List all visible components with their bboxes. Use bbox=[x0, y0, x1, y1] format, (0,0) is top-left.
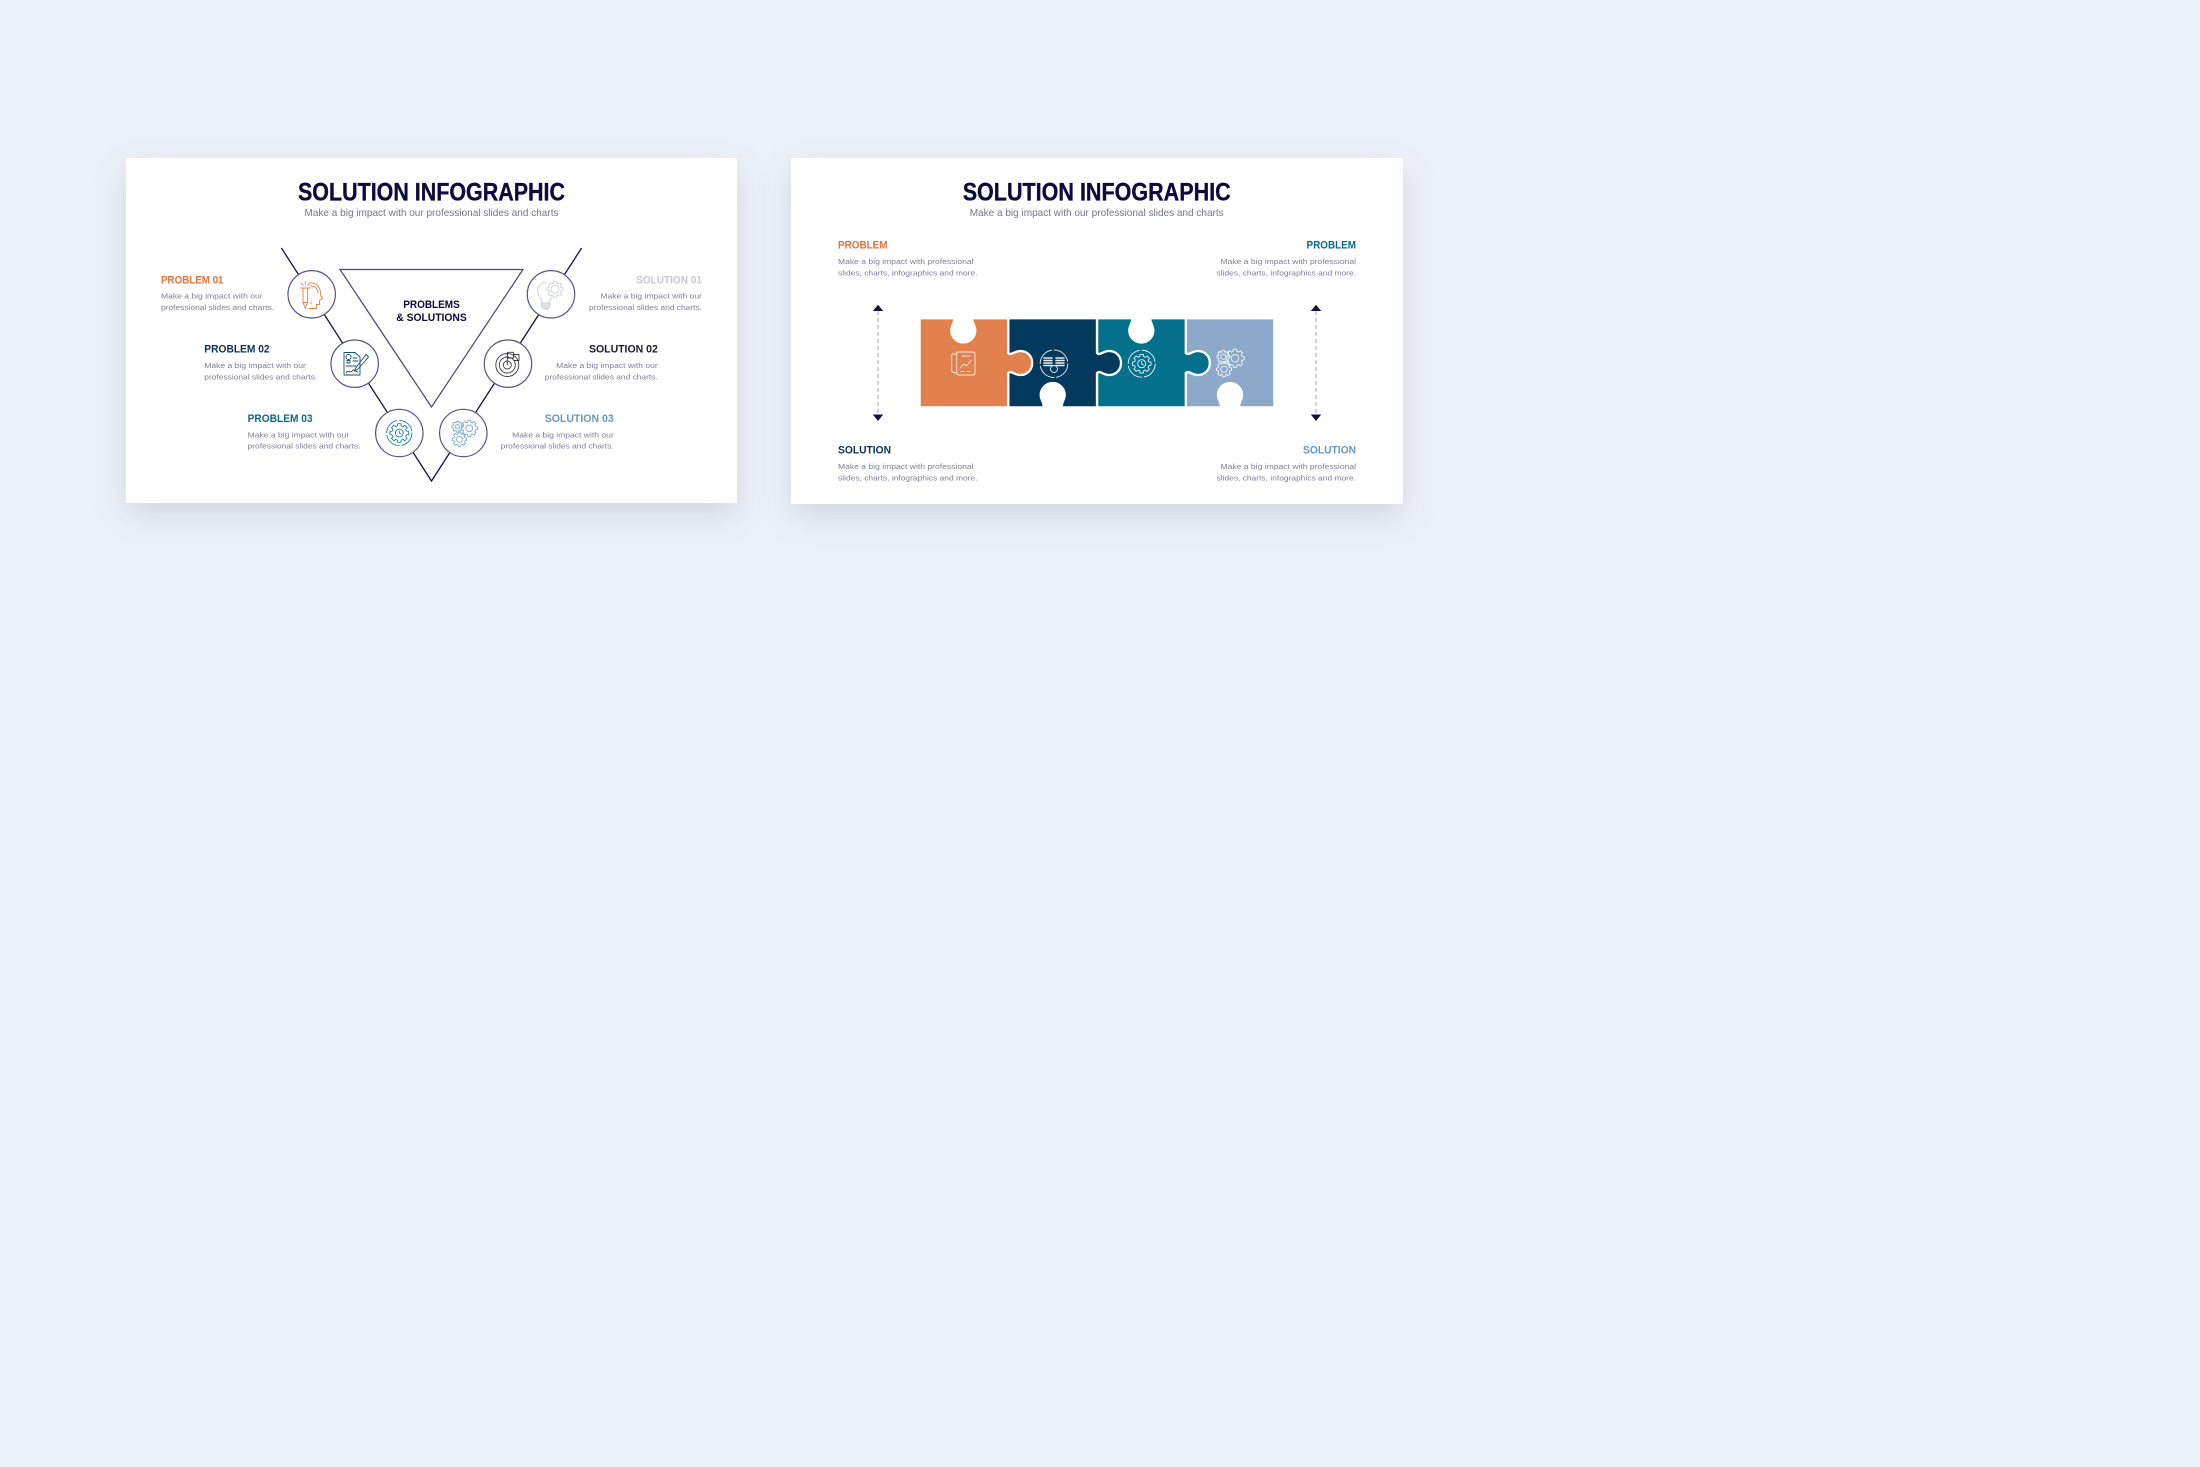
title: SOLUTION INFOGRAPHIC bbox=[298, 178, 565, 206]
block: top right problem bbox=[1216, 240, 1356, 278]
triangle label bbox=[396, 299, 467, 324]
triangle label: PROBLEMS bbox=[403, 299, 460, 311]
block: bottom left solution bbox=[838, 445, 978, 482]
arrow: left double-headed bbox=[873, 305, 883, 421]
puzzle piece: blue bbox=[1186, 318, 1274, 407]
block: solution 01: professional slides and charts. bbox=[589, 303, 702, 312]
icon: light bulb with gear bbox=[527, 271, 575, 318]
block: bottom right solution: Make a big impact with professional bbox=[1220, 462, 1356, 471]
block: top left problem bbox=[838, 240, 978, 278]
block: solution 03: professional slides and charts. bbox=[501, 442, 614, 451]
block: bottom right solution: SOLUTION bbox=[1303, 445, 1356, 457]
block: problem 02: professional slides and charts. bbox=[204, 372, 317, 381]
block: problem 02: PROBLEM 02 bbox=[204, 344, 270, 356]
block: solution 03 bbox=[501, 413, 614, 451]
block: top left problem: PROBLEM bbox=[838, 240, 888, 252]
block: solution 02: SOLUTION 02 bbox=[589, 344, 658, 356]
icon: report with chart bbox=[952, 352, 975, 375]
block: bottom left solution: SOLUTION bbox=[838, 445, 891, 457]
subtitle: Make a big impact with our professional slides and charts bbox=[970, 207, 1224, 219]
puzzle piece: orange bbox=[920, 318, 1032, 407]
block: problem 03: PROBLEM 03 bbox=[248, 413, 313, 425]
block: problem 01: Make a big impact with our bbox=[161, 292, 263, 301]
triangle label: & SOLUTIONS bbox=[396, 312, 467, 324]
panel: puzzle problem and solution bbox=[791, 158, 1403, 504]
block: solution 01: SOLUTION 01 bbox=[636, 274, 702, 286]
puzzle chain bbox=[920, 318, 1274, 407]
block: solution 02 bbox=[545, 344, 658, 381]
block: problem 03: Make a big impact with our bbox=[248, 430, 350, 439]
block: problem 01 bbox=[161, 274, 274, 312]
block: problem 02: Make a big impact with our bbox=[204, 361, 306, 370]
block: bottom left solution: Make a big impact with professional bbox=[838, 462, 974, 471]
icon: document with pen bbox=[331, 340, 378, 387]
block: problem 01: professional slides and charts. bbox=[161, 303, 274, 312]
block: bottom right solution bbox=[1216, 445, 1356, 482]
icon: gear with clock bbox=[376, 409, 423, 457]
block: problem 03 bbox=[248, 413, 361, 451]
icon: target with flag bbox=[484, 340, 532, 387]
block: solution 02: Make a big impact with our bbox=[556, 361, 658, 370]
block: problem 03: professional slides and charts. bbox=[248, 442, 361, 451]
block: solution 01: Make a big impact with our bbox=[600, 292, 703, 301]
puzzle piece: teal bbox=[1097, 318, 1210, 407]
icon: gear in ring bbox=[1128, 350, 1155, 377]
arrow: right double-headed bbox=[1311, 305, 1321, 421]
icon: head with pencil bbox=[288, 271, 335, 318]
block: solution 03: Make a big impact with our bbox=[512, 430, 614, 439]
icon: white gears bbox=[1216, 349, 1244, 377]
title: SOLUTION INFOGRAPHIC bbox=[963, 178, 1231, 206]
block: solution 02: professional slides and charts. bbox=[545, 372, 658, 381]
block: top right problem: slides, charts, infographics and more. bbox=[1216, 268, 1356, 278]
block: top left problem: slides, charts, infographics and more. bbox=[838, 268, 978, 278]
block: top right problem: Make a big impact with professional bbox=[1220, 257, 1356, 266]
block: top right problem: PROBLEM bbox=[1306, 240, 1356, 252]
block: bottom right solution: slides, charts, infographics and more. bbox=[1216, 473, 1356, 482]
block: bottom left solution: slides, charts, infographics and more. bbox=[838, 473, 978, 482]
block: solution 03: SOLUTION 03 bbox=[545, 413, 614, 425]
large V outline bbox=[281, 248, 582, 481]
block: solution 01 bbox=[589, 274, 703, 312]
block: top left problem: Make a big impact with professional bbox=[838, 257, 974, 266]
puzzle piece: navy bbox=[1008, 318, 1121, 407]
block: problem 02 bbox=[204, 344, 317, 381]
panel: problems and solutions funnel bbox=[126, 158, 737, 503]
subtitle: Make a big impact with our professional slides and charts bbox=[304, 207, 558, 219]
icon: three gears bbox=[440, 409, 487, 457]
central triangle bbox=[340, 270, 523, 407]
block: problem 01: PROBLEM 01 bbox=[161, 274, 224, 286]
icon: circled network bbox=[1040, 350, 1068, 378]
